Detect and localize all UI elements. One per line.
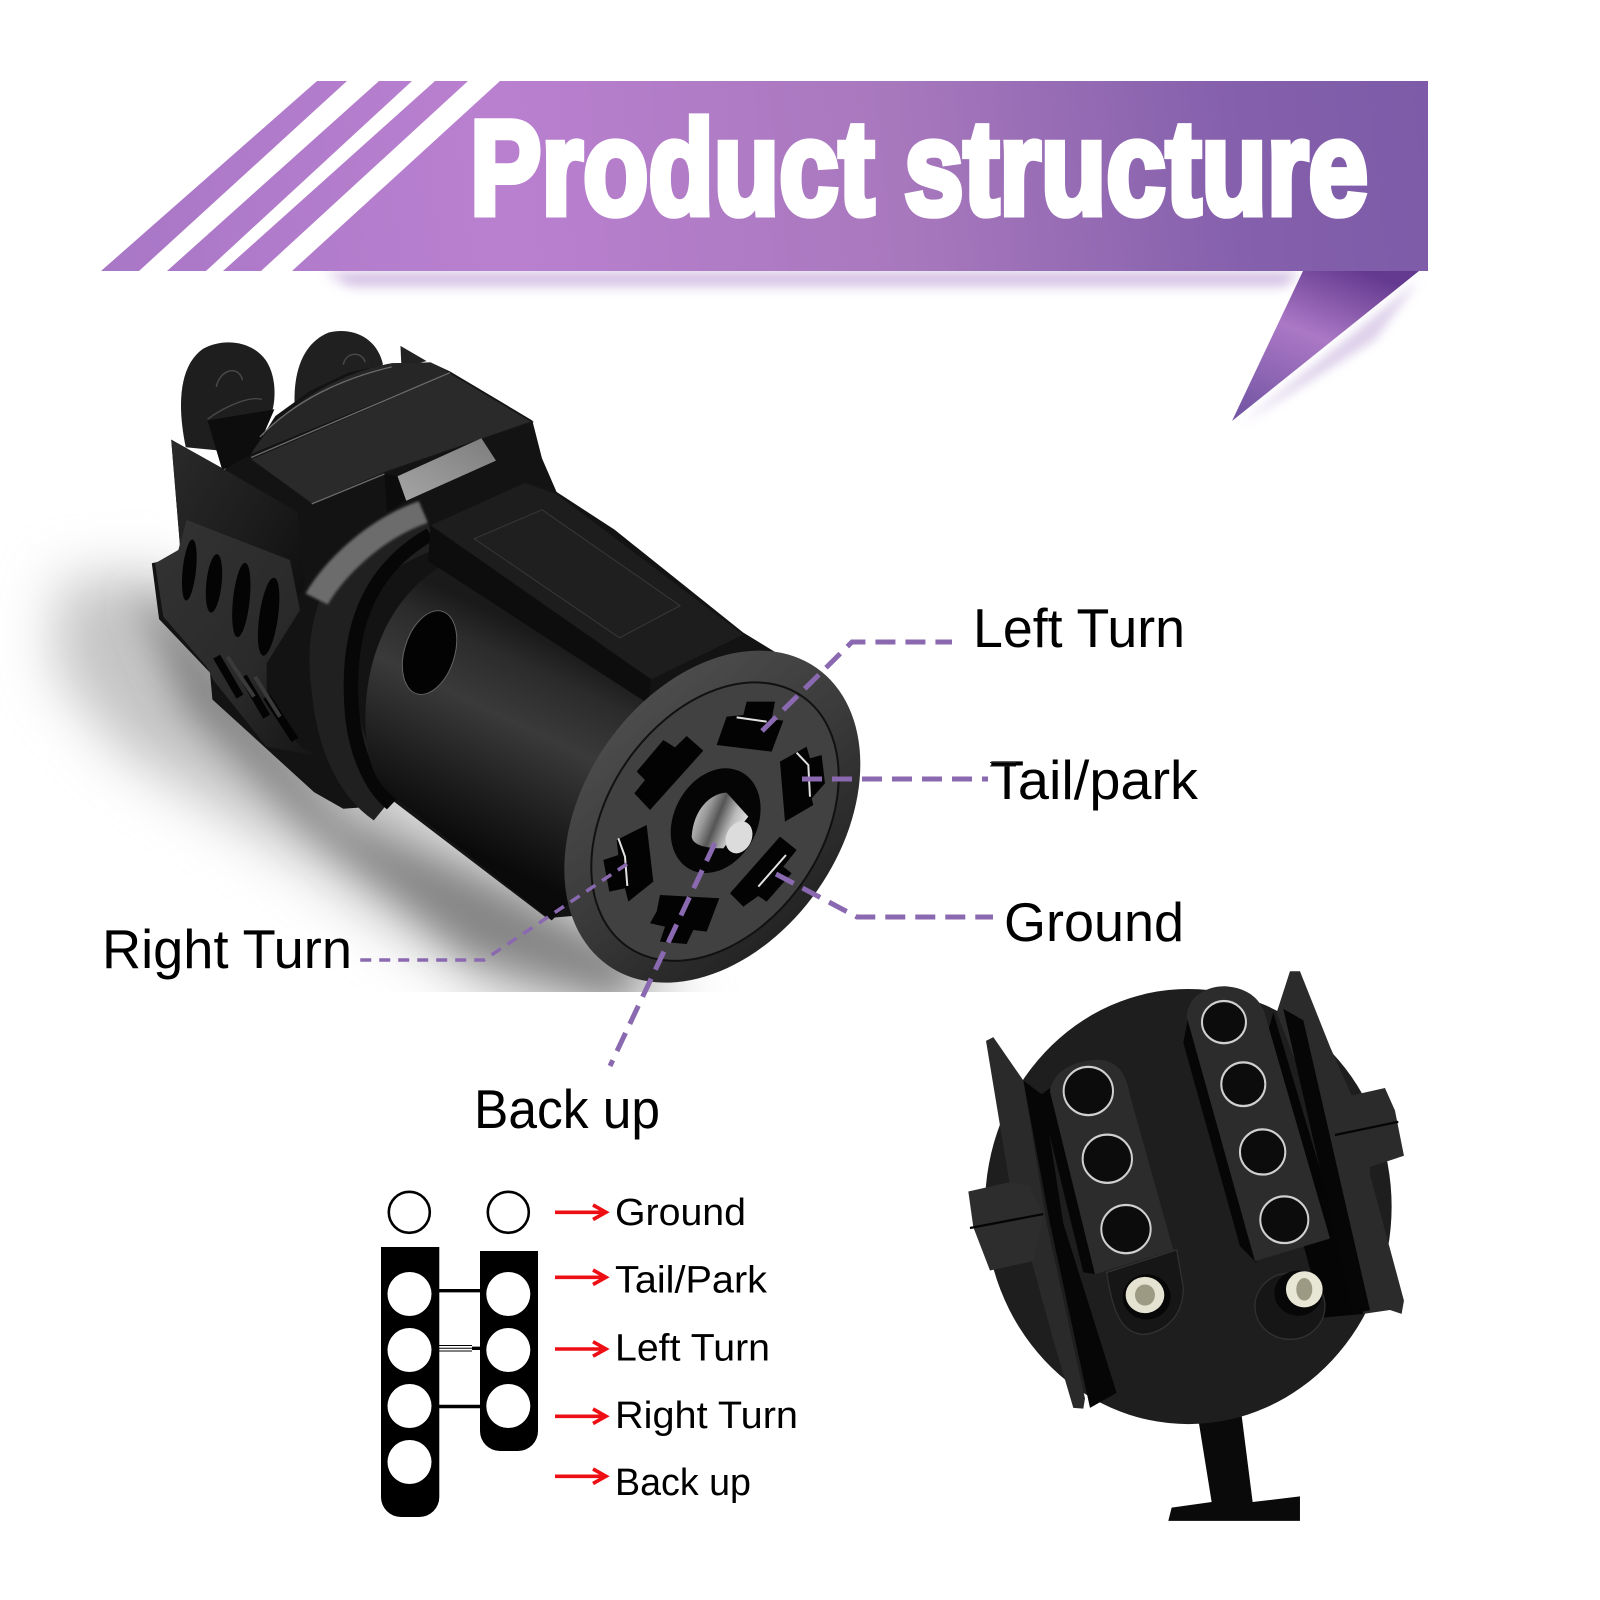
right plate holes (1202, 1001, 1308, 1243)
right clip (294, 331, 383, 409)
banner (101, 81, 1428, 425)
label: Tail/park: Tail/park (990, 749, 1198, 811)
label: Left Turn: Left Turn (973, 597, 1185, 659)
outer disc (503, 594, 922, 1039)
lower right slot (730, 837, 797, 907)
top plate (250, 373, 532, 504)
leader line: left turn (762, 642, 952, 731)
red arrows (555, 1205, 606, 1484)
flat top (431, 483, 743, 679)
bottom slot (650, 895, 719, 944)
center socket (653, 753, 778, 889)
banner stripes and body (101, 81, 1428, 271)
collar (331, 530, 431, 804)
body silhouette (152, 362, 809, 918)
right clip detail (343, 354, 365, 365)
left wing (171, 440, 304, 659)
wing inner shadow (1283, 1009, 1370, 1314)
left plate (1050, 1060, 1173, 1274)
rear view photo (968, 971, 1404, 1521)
left slot (603, 825, 653, 902)
collar dark groove (351, 534, 431, 804)
upper vents (179, 539, 283, 657)
left holes (388, 1272, 432, 1484)
leader line: back up (610, 843, 715, 1066)
rear round top (251, 362, 450, 454)
right wing shadow (1257, 1013, 1363, 1318)
left clip detail (208, 371, 262, 419)
main plug photo (152, 331, 922, 1039)
rear clips and housing (152, 331, 809, 920)
label: Back up: Back up (474, 1078, 660, 1140)
flat top label recess (474, 510, 680, 638)
right holes (486, 1272, 530, 1428)
left wing (986, 1037, 1085, 1409)
right plate side (1183, 1016, 1257, 1263)
center cone (692, 793, 748, 848)
left bump (1107, 1250, 1183, 1335)
plate highlight (251, 367, 450, 504)
legend text: Left Turn: Left Turn (615, 1328, 770, 1370)
lower rib light (227, 657, 280, 717)
label: Ground: Ground (1004, 891, 1184, 953)
wiring diagram (381, 1192, 798, 1517)
cylinder (365, 561, 663, 920)
lower vents (217, 657, 295, 740)
right bump (1255, 1273, 1325, 1339)
left plate side (1040, 1088, 1097, 1274)
right wing (1277, 971, 1404, 1314)
small tab (400, 346, 427, 367)
left cross slit (970, 1214, 1043, 1228)
disc (985, 989, 1392, 1424)
left cross (968, 1182, 1043, 1271)
rear vents (155, 520, 320, 757)
left plate holes (1064, 1067, 1151, 1253)
cylinder hole (393, 605, 466, 700)
legend text: Right Turn: Right Turn (615, 1395, 798, 1437)
center pin tip (720, 817, 758, 858)
legend text: Ground: Ground (615, 1192, 746, 1234)
flat top side (428, 525, 651, 704)
ground shadow (55, 575, 680, 1020)
leader line: ground (776, 874, 993, 917)
leader line: right turn (359, 864, 627, 960)
collar highlight (317, 512, 423, 599)
plug face (503, 594, 922, 1039)
silver stamp (398, 438, 496, 501)
left clip (181, 342, 275, 454)
leader line: tail/park (802, 776, 988, 782)
vented panel (155, 520, 320, 757)
legend text: Tail/Park: Tail/Park (615, 1260, 768, 1302)
top slot (717, 702, 783, 752)
ribbon tail (1232, 271, 1419, 421)
left wing shadow (1023, 1080, 1117, 1408)
stem and foot (1168, 1415, 1300, 1521)
left connector block (381, 1247, 439, 1517)
stray mark over T (990, 762, 1016, 766)
right plate (1187, 986, 1330, 1261)
banner shadow (325, 272, 1300, 286)
right pin (1274, 1271, 1323, 1316)
title: Product structure (470, 94, 1368, 243)
connecting lines (439, 1291, 480, 1406)
clip stem (208, 409, 274, 470)
right connector block (480, 1251, 538, 1451)
upper left slot (634, 736, 703, 810)
right cross slit (1335, 1122, 1398, 1135)
inner ring (540, 635, 890, 1008)
ribbon tail shadow (1240, 280, 1419, 425)
legend text: Back up: Back up (615, 1462, 751, 1504)
label: Right Turn: Right Turn (102, 918, 352, 980)
stamp side (384, 474, 406, 512)
top circles (389, 1192, 529, 1233)
terminal blades (618, 717, 810, 887)
right slot (780, 747, 825, 822)
middle triple line (439, 1346, 472, 1351)
left pin (1123, 1274, 1171, 1319)
